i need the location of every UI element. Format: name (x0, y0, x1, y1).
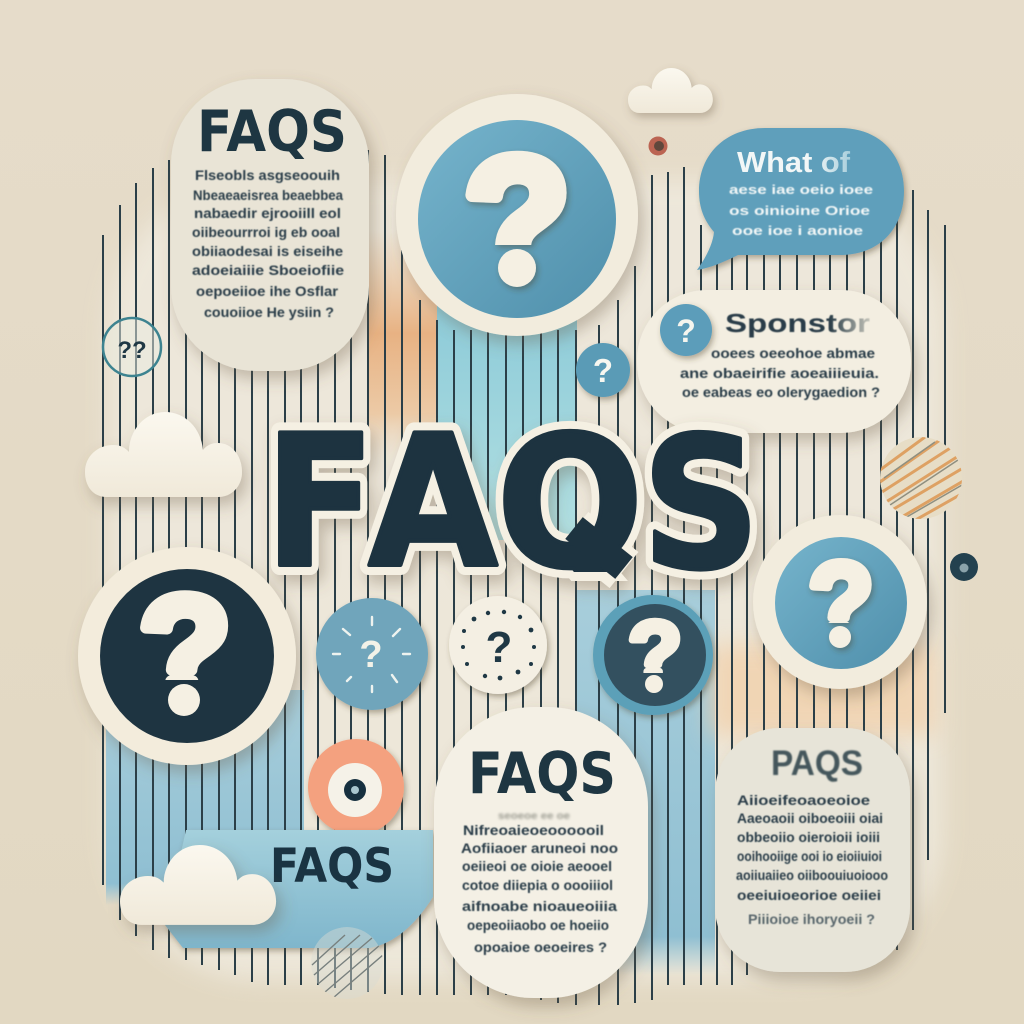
card body text: adoeiaiiie Sboeiofiie (192, 262, 344, 278)
title: FAQS: S (642, 398, 760, 610)
banner: FAQS: FAQS (270, 839, 394, 894)
card heading: FAQS (468, 741, 616, 807)
card body text: oepeoiiaobo oe hoeiio (467, 917, 609, 933)
large question badge: top centre (396, 94, 638, 336)
bubble text: aese iae oeio ioee (729, 183, 873, 197)
card: top left FAQs (171, 79, 369, 371)
speech bubble: What of (697, 128, 904, 270)
dot: dark (950, 553, 978, 581)
cloud: bottom left (120, 845, 276, 925)
card body text (461, 822, 618, 955)
bubble heading: What of (737, 147, 850, 179)
badge: peach eye (308, 739, 404, 835)
card body text: oiibeourrroi ig eb ooal (192, 224, 340, 240)
card body text: obiiaodesai is eiseihe (192, 243, 343, 259)
bubble text: ooe ioe i aonioe (732, 224, 863, 238)
card text: ooees oeeohoe abmae (711, 345, 875, 361)
card body text: obbeoiio oieroioii ioiii (737, 829, 880, 845)
card text: oe eabeas eo olerygaedion ? (682, 384, 880, 400)
title: FAQS (269, 420, 770, 600)
card: Sponstor (637, 290, 911, 433)
card body text: Nifreoaieoeoooooil (463, 822, 604, 838)
dot: red (648, 136, 668, 156)
card body text: Aiioeifeoaoeoioe (737, 792, 870, 808)
card text (680, 345, 880, 400)
title: FAQS: F (265, 396, 375, 608)
striped circle: orange (880, 437, 965, 522)
title: FAQS: Q (497, 397, 643, 609)
card body text: opoaioe oeoeires ? (474, 939, 607, 955)
card heading: PAQS (771, 744, 863, 783)
card body text: Aaeoaoii oiboeoiii oiai (737, 810, 883, 826)
title: FAQS: A (368, 397, 498, 609)
card: bottom right FAQs (715, 728, 910, 972)
badge: cream with dots (449, 596, 547, 694)
vertical line pattern (103, 140, 945, 1005)
badge: blue with ticks: ? (359, 634, 383, 676)
badge: blue with ticks (316, 598, 428, 710)
colour patches behind the lines (106, 230, 935, 975)
card body text (736, 792, 888, 927)
badge: dark with teal ring (593, 595, 713, 715)
small question badge (576, 343, 630, 397)
card body text: Nbeaeaeisrea beaebbea (193, 187, 343, 203)
card body text: cotoe diiepia o oooiiiol (462, 877, 613, 893)
large question badge: right (753, 515, 927, 689)
small question badge: ? (593, 352, 613, 389)
bubble text (729, 183, 873, 238)
badge: dark with teal ring: ? (628, 603, 682, 702)
title: FAQS: S (642, 398, 760, 610)
card body text: nabaedir ejrooiill eol (194, 205, 341, 221)
bubble text: os oinioine Orioe (729, 204, 870, 218)
card: bottom centre FAQs (434, 707, 648, 998)
striped circle: bottom (311, 927, 383, 999)
card heading: FAQS (197, 99, 347, 165)
card body text: aoiiuaiieo oiiboouiuoiooo (736, 867, 888, 883)
card body text: Flseobls asgseoouih (195, 167, 340, 183)
card body text: aifnoabe nioaueoiiia (462, 898, 617, 914)
large question badge: dark left (78, 547, 296, 765)
faded subheading: seoeoe ee oe (498, 811, 571, 822)
card heading: Sponstor (725, 308, 870, 338)
icon: question badge: ? (676, 313, 696, 349)
card body text: oepoeiioe ihe Osflar (196, 283, 339, 299)
ring with question marks: ?? (117, 337, 147, 364)
card body text: ooihooiige ooi io eioiiuioi (737, 848, 882, 864)
cloud: left (85, 412, 242, 497)
title: FAQS: Q (497, 397, 643, 609)
banner: FAQS (165, 830, 433, 948)
large question badge: top centre: ? (464, 122, 570, 321)
title: FAQS: A (368, 397, 498, 609)
card body text: Piiioioe ihoryoeii ? (748, 911, 875, 927)
card body text: Aofiiaoer aruneoi noo (461, 840, 618, 856)
card body text: couoiioe He ysiin ? (204, 304, 334, 320)
ring with question marks (103, 318, 161, 376)
card body text (192, 167, 344, 320)
large question badge: dark left: ? (139, 565, 231, 733)
card body text: oeiieoi oe oioie aeooel (462, 858, 612, 874)
large question badge: right: ? (809, 541, 873, 666)
cloud: top (628, 68, 713, 113)
card body text: oeeiuioeorioe oeiiei (737, 887, 881, 903)
card text: ane obaeirifie aoeaiiieuia. (680, 365, 879, 381)
badge: cream with dots: ? (486, 623, 512, 672)
title: FAQS: F (265, 396, 375, 608)
icon: question badge (660, 304, 712, 356)
